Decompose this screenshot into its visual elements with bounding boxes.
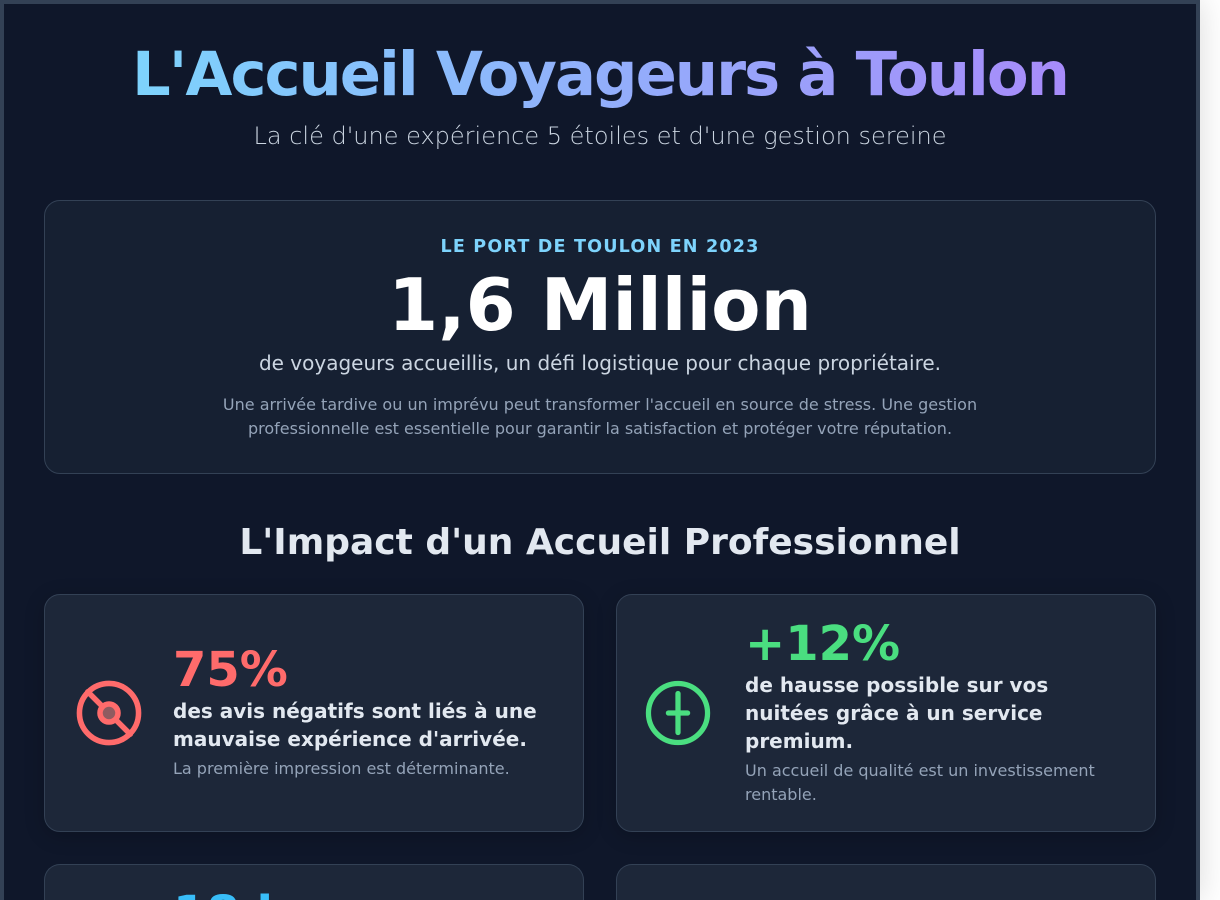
statistic description: de hausse possible sur vos (745, 673, 1048, 697)
panel: revenue growth (616, 594, 1156, 832)
hero label: LE PORT DE TOULON EN 2023 (440, 237, 760, 257)
statistic description (745, 673, 1048, 753)
hero description: Une arrivée tardive ou un imprévu peut transformer l'accueil en source de stress. Une gestion (223, 395, 977, 414)
statistic note: Un accueil de qualité est un investissement (745, 761, 1095, 780)
statistic 75%: 75% (173, 642, 288, 698)
hero subtitle: de voyageurs accueillis, un défi logistique pour chaque propriétaire. (259, 351, 941, 375)
hero description: professionnelle est essentielle pour garantir la satisfaction et protéger votre réputation. (248, 419, 952, 438)
title: L'Accueil Voyageurs à Toulon (132, 40, 1068, 110)
icon: plus circle (646, 680, 710, 746)
statistic +12%: +12% (745, 616, 900, 672)
icon: no entry (76, 680, 142, 746)
panel: response time (44, 864, 584, 900)
section heading: L'Impact d'un Accueil Professionnel (239, 522, 961, 563)
subtitle: La clé d'une expérience 5 étoiles et d'une gestion sereine (254, 122, 946, 150)
panel: fourth statistic (616, 864, 1156, 900)
statistic description: nuitées grâce à un service (745, 701, 1042, 725)
statistic note: La première impression est déterminante. (173, 759, 510, 778)
panel: port statistic (44, 200, 1156, 474)
hero description (223, 395, 977, 438)
statistic description: des avis négatifs sont liés à une (173, 699, 537, 723)
statistic description: mauvaise expérience d'arrivée. (173, 727, 527, 751)
hero number: 1,6 Million (388, 263, 812, 347)
statistic description: premium. (745, 729, 853, 753)
statistic note: rentable. (745, 785, 817, 804)
panel: negative reviews (44, 594, 584, 832)
statistic description (173, 699, 537, 751)
statistic note (745, 761, 1095, 804)
